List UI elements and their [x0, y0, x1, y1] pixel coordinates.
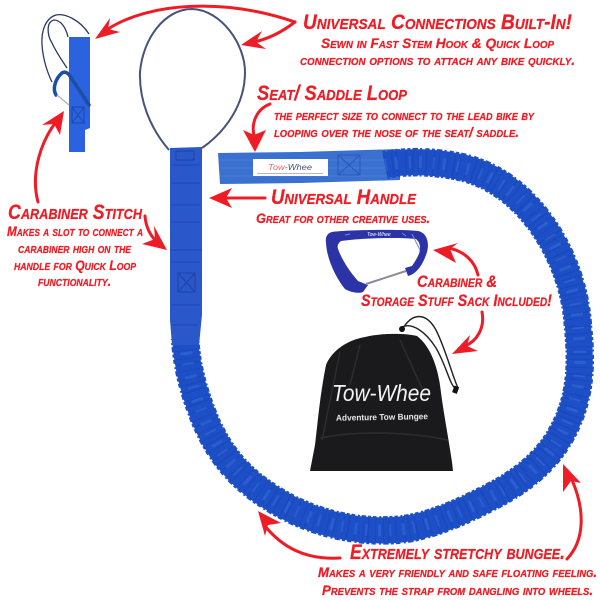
heading: Carabiner Stitch [8, 201, 143, 224]
product photo: storage stuff sack [310, 316, 459, 471]
arrow: to rope loop [241, 22, 295, 49]
description: handle for Quick Loop [14, 257, 136, 273]
heading: Universal Connections Built-In! [303, 11, 572, 34]
description: carabiner high on the [18, 240, 131, 256]
callout: carabiner stitch [7, 201, 143, 289]
product photo: small handle with carabiner [42, 15, 90, 152]
description: Great for other creative uses. [256, 210, 430, 226]
description [300, 35, 575, 68]
arrow: bungee left [258, 511, 340, 558]
arrow: bungee right [563, 464, 581, 559]
product photo: carabiner [326, 230, 428, 293]
callout: carabiner and stuff sack: Storage Stuff Sack Included! [361, 291, 552, 310]
universal handle strap [170, 147, 202, 345]
heading: Extremely stretchy bungee. [350, 541, 565, 564]
arrow: stuff sack [452, 312, 483, 354]
arrow: seat saddle loop [243, 104, 270, 152]
callout: carabiner and stuff sack: Carabiner & [417, 272, 497, 291]
seat saddle loop strap [218, 149, 400, 184]
description: connection options to attach any bike quickly. [300, 52, 575, 68]
description: Makes a slot to connect a [7, 223, 143, 239]
sack logo: Adventure Tow Bungee [336, 411, 428, 423]
description: the perfect size to connect to the lead bike by [274, 107, 535, 123]
callout: universal handle [256, 186, 430, 226]
description: looping over the nose of the seat/ saddle. [274, 124, 519, 140]
sack logo: Tow-Whee [332, 380, 431, 406]
product photo: carabiner: Tow-Whee [367, 232, 391, 238]
brand tag: Tow -Whee [268, 163, 313, 172]
rope loop [140, 9, 245, 150]
callout: carabiner and stuff sack [361, 272, 552, 310]
heading: Universal Handle [271, 186, 417, 209]
arrow: carabiner stitch to handle [142, 216, 167, 250]
description: Sewn in Fast Stem Hook & Quick Loop [321, 35, 554, 51]
arrow: carabiner [433, 243, 478, 275]
arrow: universal handle [209, 188, 265, 208]
description: functionality. [38, 273, 111, 289]
description [274, 107, 535, 140]
stretchy bungee cord [185, 162, 580, 530]
arrow: to small handle loop [95, 6, 295, 39]
brand tag [253, 159, 328, 176]
heading: Seat/ Saddle Loop [257, 82, 408, 105]
arrow: carabiner stitch to small handle [35, 111, 64, 202]
callout: extremely stretchy bungee [318, 541, 597, 598]
sack logo [332, 380, 431, 423]
description [318, 564, 597, 598]
callout: universal connections [300, 11, 575, 68]
callout: seat saddle loop [257, 82, 535, 140]
description [7, 223, 143, 289]
